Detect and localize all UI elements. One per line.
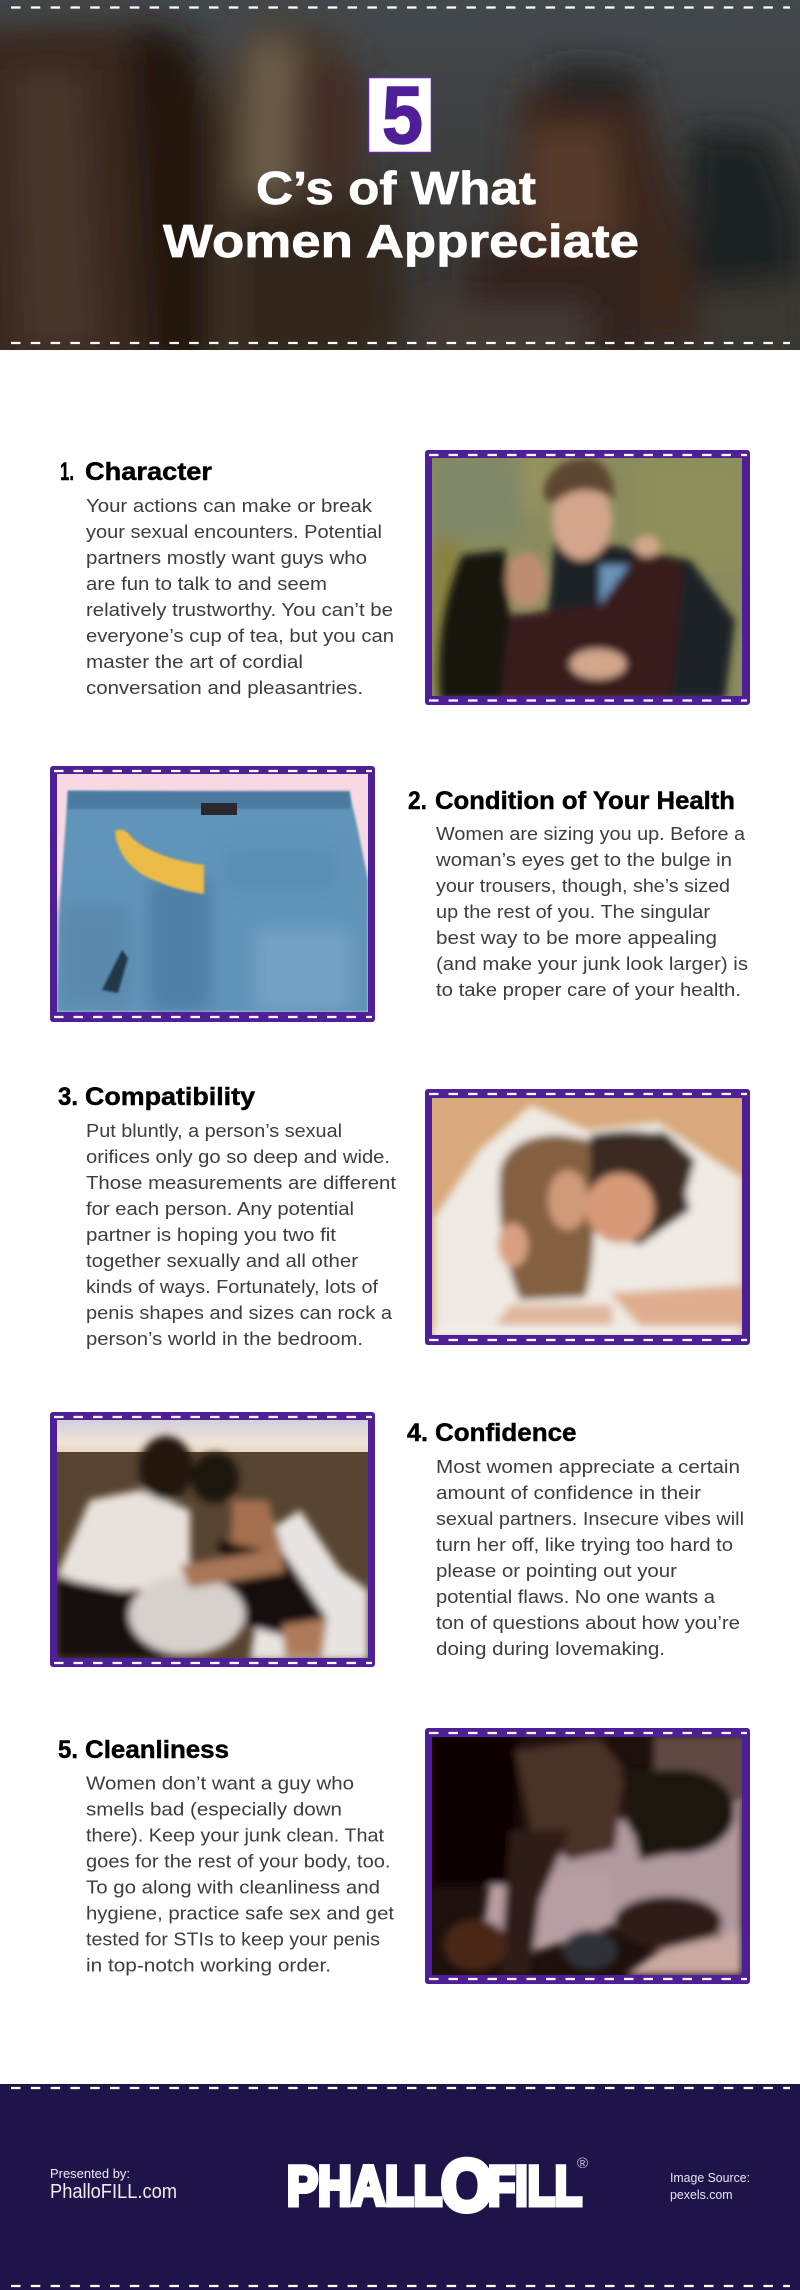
body text: Women don’t want a guy who [86, 1772, 354, 1794]
body text: conversation and pleasantries. [86, 677, 363, 698]
heading: Condition of Your Health [435, 787, 735, 815]
section 2: Condition of Your Health [50, 766, 748, 1022]
body text: tested for STIs to keep your penis [86, 1928, 380, 1950]
heading: 5. [58, 1736, 78, 1764]
section 1: Character [60, 450, 750, 705]
body text [86, 1120, 396, 1349]
body text [86, 1772, 394, 1976]
logo: PhalloFILL: ® [577, 2155, 588, 2172]
body text: orifices only go so deep and wide. [86, 1146, 390, 1167]
heading: Confidence [435, 1419, 577, 1447]
heading: 3. [58, 1083, 78, 1111]
body text: Those measurements are different [86, 1172, 396, 1193]
footer [0, 2084, 800, 2290]
body text: relatively trustworthy. You can’t be [86, 599, 393, 620]
section 5: Cleanliness [58, 1728, 750, 1984]
body text: your sexual encounters. Potential [86, 521, 382, 542]
body text: for each person. Any potential [86, 1198, 354, 1219]
body text: kinds of ways. Fortunately, lots of [86, 1276, 379, 1297]
body text: Put bluntly, a person’s sexual [86, 1120, 342, 1141]
body text: potential flaws. No one wants a [436, 1586, 716, 1607]
logo: PhalloFILL: O [441, 2146, 493, 2226]
body text: Most women appreciate a certain [436, 1456, 740, 1477]
body text: ton of questions about how you’re [436, 1612, 740, 1633]
heading: Compatibility [85, 1083, 255, 1111]
presented by: Presented by: [50, 2166, 130, 2181]
body text: your trousers, though, she’s sized [436, 875, 730, 896]
body text: to take proper care of your health. [436, 979, 741, 1000]
top stitching [11, 6, 790, 9]
title: C’s of What [256, 162, 536, 214]
body text [86, 495, 394, 698]
body text: please or pointing out your [436, 1560, 677, 1581]
logo: PhalloFILL: FILL [488, 2154, 582, 2217]
body text: doing during lovemaking. [436, 1638, 665, 1659]
image source: pexels.com [670, 2187, 733, 2202]
body text: smells bad (especially down [86, 1798, 342, 1820]
body text: person’s world in the bedroom. [86, 1328, 363, 1349]
section 4: Confidence [50, 1412, 744, 1667]
section 3: Compatibility [58, 1083, 750, 1349]
heading: Character [85, 458, 212, 486]
body text: partners mostly want guys who [86, 547, 367, 568]
body text: are fun to talk to and seem [86, 573, 327, 594]
hero photo: three friends, blurred and darkened [0, 0, 800, 370]
body text: woman’s eyes get to the bulge in [435, 849, 732, 870]
image source: Image Source: [670, 2170, 750, 2185]
body text: master the art of cordial [86, 651, 303, 672]
photo frame: couple embracing outdoors [425, 450, 750, 705]
body text: together sexually and all other [86, 1250, 358, 1271]
body text: amount of confidence in their [436, 1482, 701, 1503]
body text: (and make your junk look larger) is [436, 953, 748, 974]
body text: in top-notch working order. [86, 1954, 331, 1976]
body text: sexual partners. Insecure vibes will [436, 1508, 744, 1529]
title [163, 162, 639, 267]
logo: PhalloFILL [287, 2146, 588, 2226]
body text [435, 823, 748, 1000]
photo frame: couple on a bed [50, 1412, 375, 1667]
title: Women Appreciate [163, 215, 639, 267]
body text: Your actions can make or break [86, 495, 373, 516]
body text [436, 1456, 744, 1659]
presented by: PhalloFILL.com [50, 2181, 177, 2203]
hero banner [0, 0, 800, 370]
body text: best way to be more appealing [436, 927, 717, 948]
heading: 2. [408, 787, 427, 815]
heading: Cleanliness [85, 1736, 229, 1764]
body text: partner is hoping you two fit [86, 1224, 336, 1245]
body text: up the rest of you. The singular [436, 901, 710, 922]
body text: there). Keep your junk clean. That [86, 1824, 384, 1846]
photo frame: jeans and banana [50, 766, 375, 1022]
logo: PhalloFILL: PHALL [287, 2154, 442, 2217]
number badge: 5: 5 [382, 70, 423, 161]
photo frame: dim bedroom scene [425, 1728, 750, 1984]
body text: hygiene, practice safe sex and get [86, 1902, 394, 1924]
body text: To go along with cleanliness and [86, 1876, 380, 1898]
heading: 4. [407, 1419, 428, 1447]
body text: Women are sizing you up. Before a [436, 823, 746, 844]
presented by [50, 2166, 177, 2203]
bottom stitching [11, 342, 790, 344]
body text: penis shapes and sizes can rock a [86, 1302, 393, 1323]
image source [670, 2170, 750, 2202]
body text: turn her off, like trying too hard to [436, 1534, 733, 1555]
photo frame: couple under a white sheet [425, 1089, 750, 1345]
body text: everyone’s cup of tea, but you can [86, 625, 394, 646]
body text: goes for the rest of your body, too. [86, 1850, 390, 1872]
heading: 1. [60, 458, 74, 486]
